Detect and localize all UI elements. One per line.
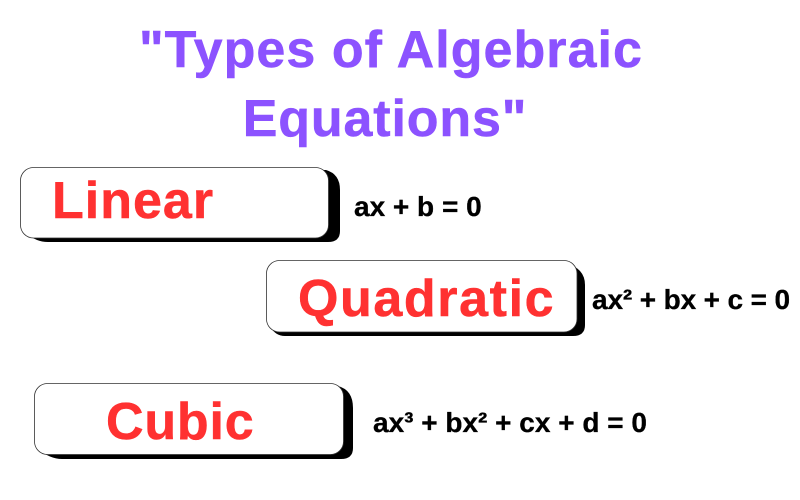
equation: quadratic: ax² + bx + c = 0: [592, 284, 790, 315]
button: linear box: [20, 167, 340, 242]
title: [139, 21, 643, 148]
label: Cubic: Cubic: [106, 393, 254, 451]
title: "Types of Algebraic: [139, 21, 643, 79]
equation: linear: ax + b = 0: [354, 191, 482, 222]
panel: quadratic: [266, 260, 585, 336]
label: Quadratic: Quadratic: [298, 270, 555, 328]
panel: linear: [20, 167, 340, 242]
button: quadratic box: [266, 260, 585, 336]
panel: cubic: [34, 383, 353, 459]
title: Equations": [243, 90, 527, 148]
equation: cubic: ax³ + bx² + cx + d = 0: [373, 407, 647, 438]
button: cubic box: [34, 383, 353, 459]
label: Linear: Linear: [52, 172, 214, 230]
